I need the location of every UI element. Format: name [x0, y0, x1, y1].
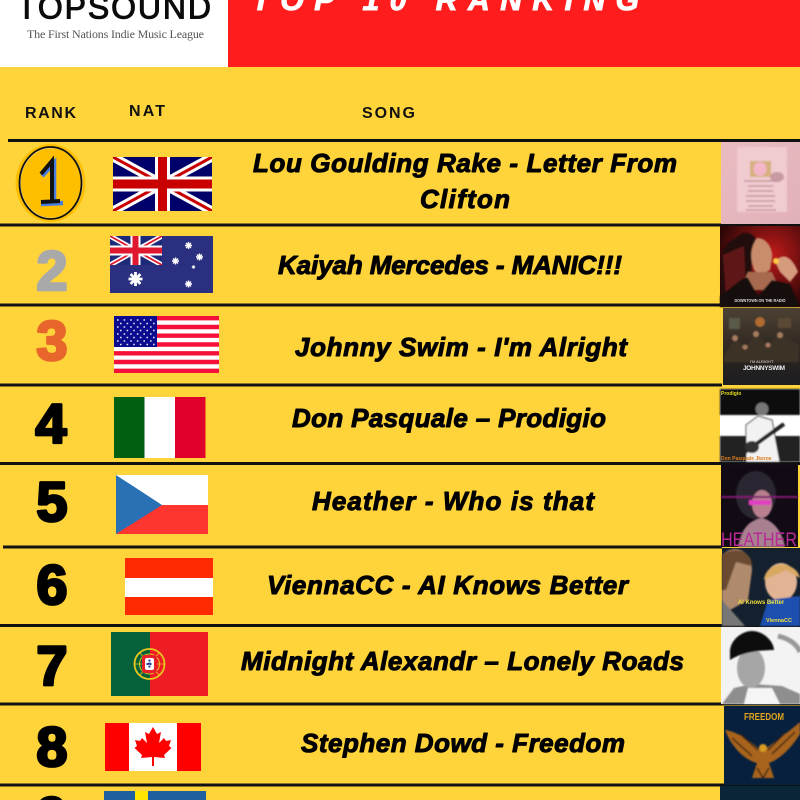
album art 6: [722, 548, 800, 626]
rank 5: 5: [36, 470, 68, 533]
rank 6: 6: [36, 553, 68, 616]
album art 7: [721, 627, 800, 704]
song 5: Heather - Who is that: [312, 486, 595, 516]
column headers: [25, 103, 415, 122]
song 3: Johnny Swim - I'm Alright: [295, 332, 628, 362]
column headers: NAT: [129, 103, 165, 120]
song 6: ViennaCC - AI Knows Better: [267, 570, 630, 600]
rank 8: 8: [36, 715, 68, 778]
album art 1: [721, 142, 800, 224]
album art 8: FREEDOM: [744, 712, 784, 723]
album art 3: I'M ALRIGHT: [750, 359, 774, 364]
flag: Portugal: [111, 632, 208, 696]
song 8: Stephen Dowd - Freedom: [301, 728, 625, 758]
album art 4: [720, 389, 800, 462]
flag: Australia: [110, 236, 213, 293]
rank 3: 3: [36, 309, 68, 372]
flag: United Kingdom: [113, 157, 212, 211]
song 1: Lou Goulding Rake - Letter From: [253, 148, 677, 178]
album art 4: Don Pasquale Jkeroe: [721, 456, 772, 462]
song 4: Don Pasquale – Prodigio: [292, 403, 606, 433]
flag: Italy: [114, 397, 206, 458]
album art 6: ViennaCC: [766, 618, 792, 624]
album art 3: JOHNNYSWIM: [743, 365, 785, 372]
song 1: [253, 148, 677, 214]
album art 5: [721, 465, 798, 551]
flag: Canada: [105, 723, 201, 771]
logo panel: [0, 0, 228, 67]
logo tagline: The First Nations Indie Music League: [27, 27, 204, 41]
rank 4: 4: [35, 392, 67, 455]
album art 3: [723, 308, 800, 385]
flag: Austria: [125, 558, 213, 615]
flag: United States: [114, 316, 219, 373]
album art 9: [720, 786, 800, 800]
album art 4: Prodigio: [721, 391, 741, 397]
album art 2: DOWNTOWN ON THE RADIO: [734, 298, 786, 303]
column headers: RANK: [25, 105, 76, 122]
title banner: [228, 0, 800, 67]
rank 7: 7: [36, 634, 68, 697]
song 2: Kaiyah Mercedes - MANIC!!!: [278, 250, 622, 280]
rank 1 badge: [16, 144, 86, 222]
album art 6: AI Knows Better: [738, 600, 785, 606]
song 1: Clifton: [420, 184, 510, 214]
song 7: Midnight Alexandr – Lonely Roads: [241, 646, 684, 676]
flag: Sweden: [104, 791, 206, 800]
column headers: SONG: [362, 105, 415, 122]
rank 2: 2: [36, 239, 68, 302]
flag: Czech Republic: [116, 475, 208, 534]
album art 8: [724, 706, 800, 785]
album art 2: [720, 226, 800, 307]
